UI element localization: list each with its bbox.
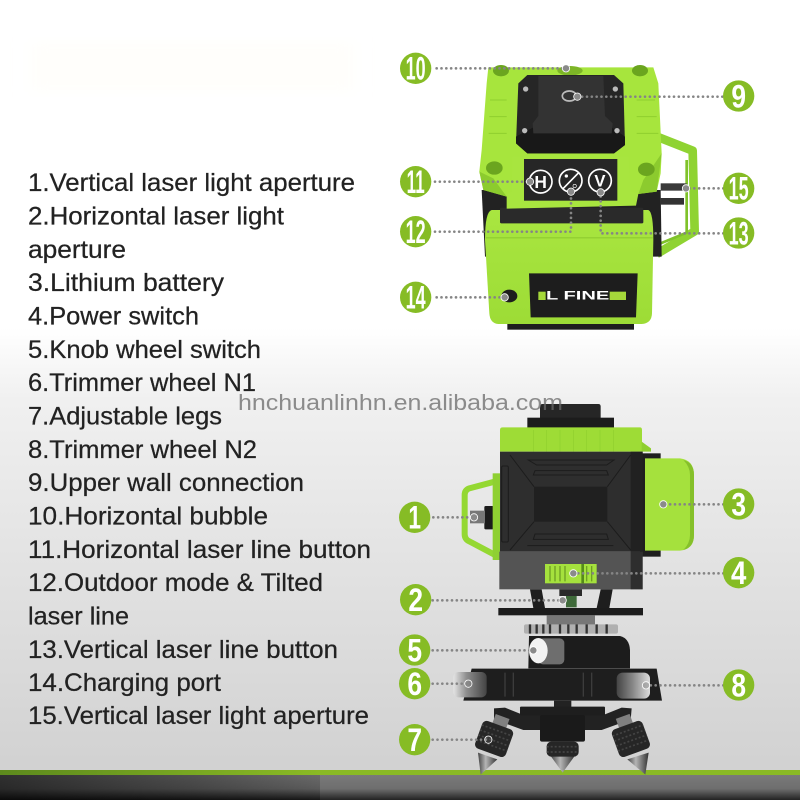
callout 6 bbox=[399, 666, 472, 702]
callout 14: 14 bbox=[406, 280, 426, 316]
feature list: 5.Knob wheel switch bbox=[28, 336, 261, 364]
feature list: laser line bbox=[28, 602, 129, 630]
V button bbox=[589, 169, 611, 192]
plate shading bbox=[479, 153, 662, 197]
button panel frame bbox=[507, 157, 638, 209]
aperture knob bbox=[484, 506, 494, 529]
callout 11: 11 bbox=[407, 164, 425, 200]
top green cap bbox=[500, 427, 642, 452]
charging port bbox=[501, 290, 517, 302]
mount socket bbox=[562, 91, 576, 101]
middle foot bbox=[547, 742, 579, 773]
callout 3: 3 bbox=[731, 486, 746, 522]
callout 2 bbox=[400, 582, 566, 618]
H button bbox=[529, 170, 552, 193]
base plate bbox=[498, 608, 643, 615]
top mount flange bbox=[527, 418, 614, 428]
callout 10: 10 bbox=[406, 51, 426, 87]
screws bbox=[522, 86, 620, 133]
knob wheel switch bbox=[529, 638, 564, 664]
callout 1 bbox=[399, 500, 478, 536]
handle bbox=[465, 481, 498, 557]
callout 6: 6 bbox=[407, 666, 422, 702]
laser rod lower bbox=[661, 198, 684, 205]
battery bbox=[645, 458, 694, 551]
logo text: L FINE bbox=[546, 289, 609, 303]
neck bbox=[547, 615, 595, 625]
horizontal aperture bbox=[559, 589, 582, 607]
housing lines bbox=[502, 455, 631, 550]
callout 4: 4 bbox=[731, 555, 747, 591]
callout 9 bbox=[574, 78, 754, 114]
center label panel bbox=[534, 487, 607, 522]
horizontal bubble bbox=[557, 66, 583, 75]
side strip bbox=[493, 473, 500, 560]
legs under housing bbox=[530, 589, 613, 608]
callout 1: 1 bbox=[408, 500, 421, 536]
V button: V bbox=[594, 172, 606, 191]
button panel bbox=[524, 159, 617, 201]
lower housing bbox=[499, 552, 643, 589]
top mount bbox=[540, 404, 601, 418]
callout 8: 8 bbox=[731, 667, 746, 703]
feature list: aperture bbox=[28, 236, 126, 264]
stem bbox=[554, 701, 571, 707]
tripod arms bbox=[494, 708, 632, 730]
dark strip below plate bbox=[500, 208, 643, 223]
floor band bbox=[0, 770, 800, 800]
feature list: 13.Vertical laser line button bbox=[28, 636, 338, 664]
upper wall connection mount bbox=[516, 75, 625, 153]
callout 13 bbox=[597, 189, 754, 251]
callout 12: 12 bbox=[406, 214, 426, 250]
callout 15 bbox=[682, 171, 754, 207]
callout 3 bbox=[660, 486, 754, 522]
battery bbox=[485, 210, 653, 324]
dark body bbox=[482, 190, 662, 257]
feature list: 4.Power switch bbox=[28, 302, 199, 330]
feature list: 2.Horizontal laser light bbox=[28, 202, 284, 230]
trimmer base bbox=[463, 669, 662, 701]
logo backing bbox=[546, 291, 610, 301]
left trimmer knob bbox=[453, 672, 487, 697]
rear battery bracket bbox=[640, 453, 661, 557]
feature list: 6.Trimmer wheel N1 bbox=[28, 369, 256, 397]
logo plate bbox=[529, 273, 638, 317]
feature list: 14.Charging port bbox=[28, 669, 221, 697]
callout 7 bbox=[399, 722, 492, 758]
logo bar bbox=[538, 292, 626, 300]
watermark: hnchuanlinhn.en.alibaba.com bbox=[238, 390, 563, 415]
right trimmer knob bbox=[617, 673, 650, 699]
callout 12 bbox=[400, 188, 575, 250]
handle inner brace bbox=[661, 160, 687, 243]
feature list: 1.Vertical laser light aperture bbox=[28, 169, 355, 197]
battery seam bbox=[486, 237, 653, 238]
H button: H bbox=[534, 172, 547, 192]
ring notches bbox=[530, 624, 607, 634]
feature list: 12.Outdoor mode & Tilted bbox=[28, 569, 323, 597]
feature list: 3.Lithium battery bbox=[28, 269, 225, 297]
feature list: 7.Adjustable legs bbox=[28, 402, 222, 430]
feature list: 9.Upper wall connection bbox=[28, 469, 304, 497]
feature list: 11.Horizontal laser line button bbox=[28, 536, 371, 564]
corner hole bbox=[493, 65, 509, 76]
corner hole bbox=[638, 163, 655, 176]
faint top-left smudge bbox=[30, 42, 355, 92]
aperture rod bbox=[661, 183, 687, 191]
battery shade edge bbox=[683, 460, 694, 550]
callout 9: 9 bbox=[731, 78, 746, 114]
callout 5 bbox=[399, 632, 537, 668]
top plate bbox=[479, 67, 662, 197]
corner hole bbox=[632, 65, 648, 76]
callout 15: 15 bbox=[729, 171, 749, 207]
feature list: 15.Vertical laser light aperture bbox=[28, 702, 369, 730]
battery foot bbox=[507, 324, 634, 330]
front view callouts bbox=[399, 486, 754, 758]
left foot bbox=[474, 711, 518, 775]
feature list bbox=[28, 169, 371, 730]
carry handle bbox=[657, 137, 695, 254]
outdoor and tilt button bbox=[559, 169, 582, 192]
feature list: 8.Trimmer wheel N2 bbox=[28, 436, 257, 464]
tripod hub bbox=[540, 715, 585, 742]
callout 13: 13 bbox=[729, 215, 749, 251]
callout 14 bbox=[400, 280, 508, 316]
callout 8 bbox=[642, 667, 754, 703]
callout 4 bbox=[570, 555, 754, 591]
callout 2: 2 bbox=[408, 582, 423, 618]
right dark strip bbox=[631, 452, 643, 589]
level marks bbox=[550, 564, 592, 583]
plate ribs bbox=[489, 100, 658, 133]
cap ribs bbox=[533, 430, 613, 452]
mount raised block bbox=[533, 76, 613, 133]
aperture barrel bbox=[470, 511, 485, 523]
mount lower edge bbox=[516, 127, 625, 153]
knurled ring bbox=[524, 624, 618, 634]
level window bbox=[545, 564, 597, 583]
base ribs bbox=[505, 673, 592, 697]
callout 10 bbox=[400, 51, 570, 87]
front view product bbox=[453, 404, 694, 775]
rotary head bbox=[528, 636, 630, 668]
right foot bbox=[607, 711, 651, 775]
callout 7: 7 bbox=[407, 722, 422, 758]
cap bump bbox=[642, 442, 651, 452]
top view callouts bbox=[400, 51, 754, 316]
feature list: 10.Horizontal bubble bbox=[28, 502, 268, 530]
tripod plate bbox=[520, 707, 605, 715]
top view product bbox=[479, 65, 695, 330]
dark housing bbox=[500, 452, 643, 552]
corner hole bbox=[486, 161, 503, 175]
callout 5: 5 bbox=[407, 632, 422, 668]
callout 11 bbox=[400, 164, 534, 200]
